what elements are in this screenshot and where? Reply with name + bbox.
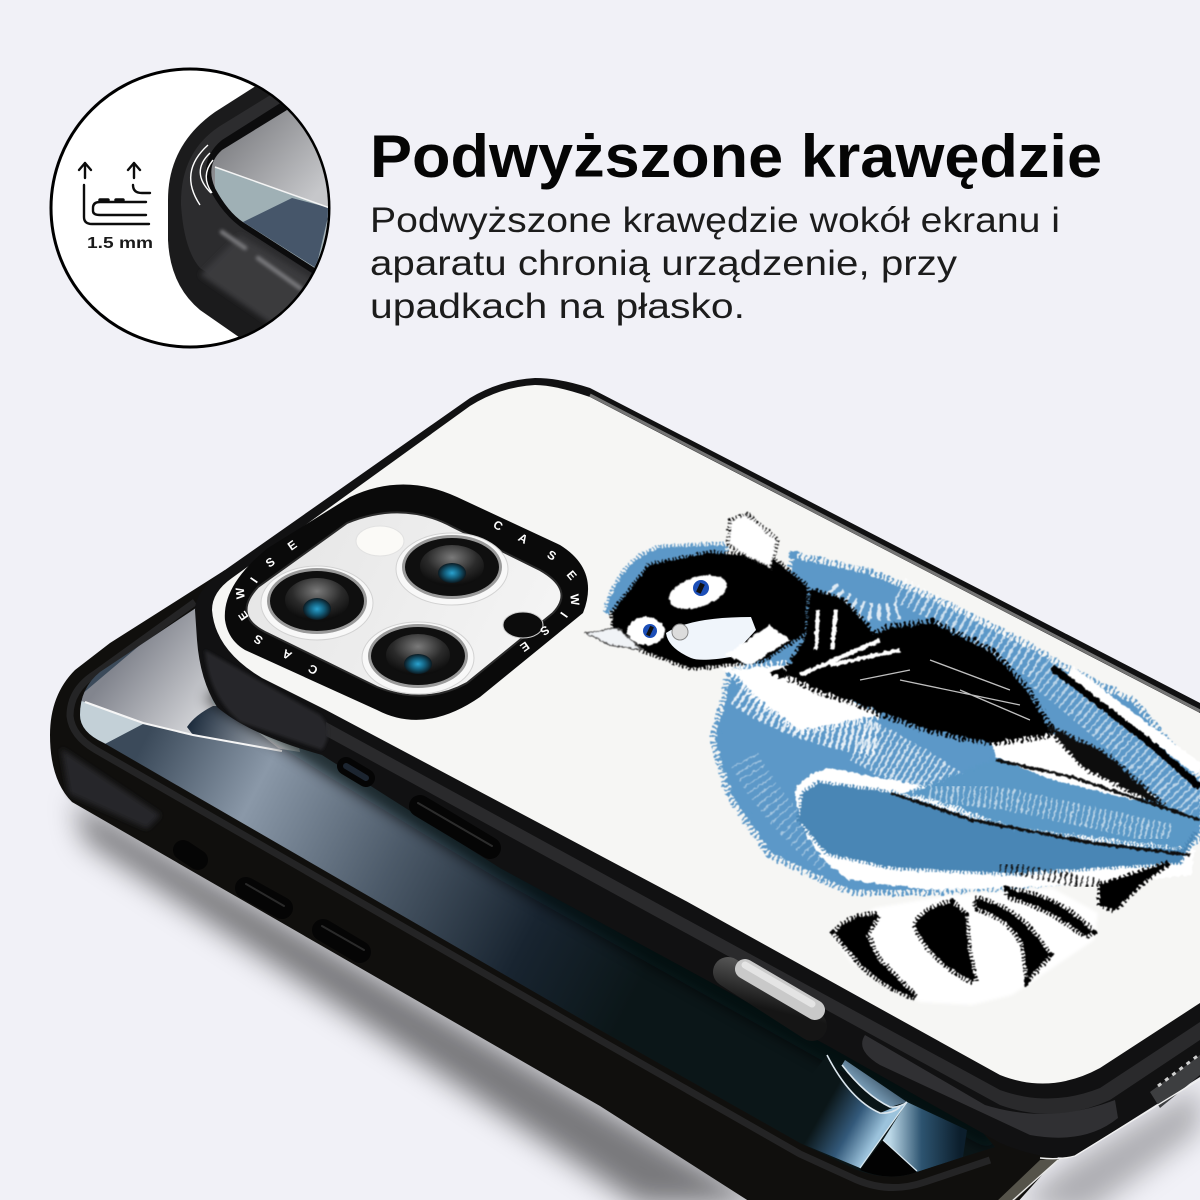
lower phone: front with screen xyxy=(50,570,1060,1200)
outer white rim xyxy=(1040,1079,1200,1159)
screen pale triangle xyxy=(80,701,143,744)
description text: aparatu chronią urządzenie, przy xyxy=(370,244,958,283)
microphone hole xyxy=(503,612,543,638)
carbon corner patch xyxy=(862,1035,1118,1138)
silver edge at bottom right xyxy=(995,1158,1060,1200)
blue body xyxy=(715,558,1200,890)
fur strokes: body xyxy=(740,590,1195,860)
white arm outline xyxy=(795,768,1195,890)
black flank line xyxy=(1052,667,1200,787)
case back face xyxy=(212,385,1200,1084)
white collar and shoulder xyxy=(731,665,880,730)
charging port xyxy=(728,965,815,1026)
muzzle xyxy=(666,617,756,660)
camera outer ring xyxy=(225,484,588,720)
corner light rays xyxy=(806,1061,904,1168)
black flank patch xyxy=(1048,727,1165,807)
white hip band xyxy=(988,733,1157,800)
camera module xyxy=(225,484,588,720)
illustration: lemur xyxy=(586,514,1200,1005)
left ear xyxy=(586,628,642,650)
lens plate xyxy=(247,512,561,696)
badge: raised edge detail xyxy=(51,69,340,347)
phone corner close-up xyxy=(168,86,328,337)
lower phone buttons on upper case xyxy=(346,766,492,848)
screen dark patch xyxy=(187,706,282,751)
case outer frame xyxy=(195,378,1200,1157)
white throat xyxy=(725,625,790,665)
flank fringe xyxy=(1070,672,1200,770)
tail white base xyxy=(831,888,1098,1005)
wave highlight xyxy=(85,702,282,751)
top phone shade xyxy=(205,660,1010,1150)
thigh blue xyxy=(911,760,1200,847)
lower phone screen xyxy=(80,608,992,1176)
lens: left xyxy=(261,566,373,640)
title: Podwyższone krawędzie xyxy=(370,123,1102,190)
black head xyxy=(612,553,807,668)
dark blue leg xyxy=(799,783,1196,873)
black saddle xyxy=(783,623,1052,742)
brand text: lower left: CASEWISE xyxy=(233,537,320,678)
description text xyxy=(370,201,1060,326)
lens: top right xyxy=(396,533,508,605)
speaker grille xyxy=(1150,1055,1200,1108)
blue head fringe xyxy=(606,545,725,612)
eyes xyxy=(643,580,709,638)
frame carbon patch xyxy=(61,748,161,829)
brand text: upper right: CASEWISE xyxy=(491,517,582,655)
lower eye patch xyxy=(627,617,665,645)
frame inner rim xyxy=(70,602,990,1188)
top lip highlight xyxy=(590,395,1200,711)
description text: Podwyższone krawędzie wokół ekranu i xyxy=(370,201,1060,240)
lower phone frame xyxy=(50,570,1060,1200)
shoulder stripes xyxy=(783,590,880,675)
lower phone side buttons xyxy=(183,850,364,952)
leg dark outlines xyxy=(891,760,1200,855)
case inner bevel xyxy=(326,722,1200,1114)
white ear xyxy=(728,514,778,568)
upper phone: back case xyxy=(195,378,1200,1159)
screen sky area xyxy=(82,608,300,752)
camera corner carbon button xyxy=(205,650,328,750)
label: 1.5 mm: 1.5 mm xyxy=(87,235,153,252)
icon: raised edge diagram xyxy=(79,163,150,224)
description text: upadkach na płasko. xyxy=(370,287,745,326)
nose xyxy=(672,624,688,640)
white streaks in saddle xyxy=(860,660,1030,720)
upper eye patch xyxy=(665,568,731,616)
flash xyxy=(356,526,404,556)
lens: bottom xyxy=(362,622,474,694)
black hand xyxy=(1100,863,1169,910)
tail stripes xyxy=(835,890,1092,997)
shadows under the phones xyxy=(75,800,1200,1200)
